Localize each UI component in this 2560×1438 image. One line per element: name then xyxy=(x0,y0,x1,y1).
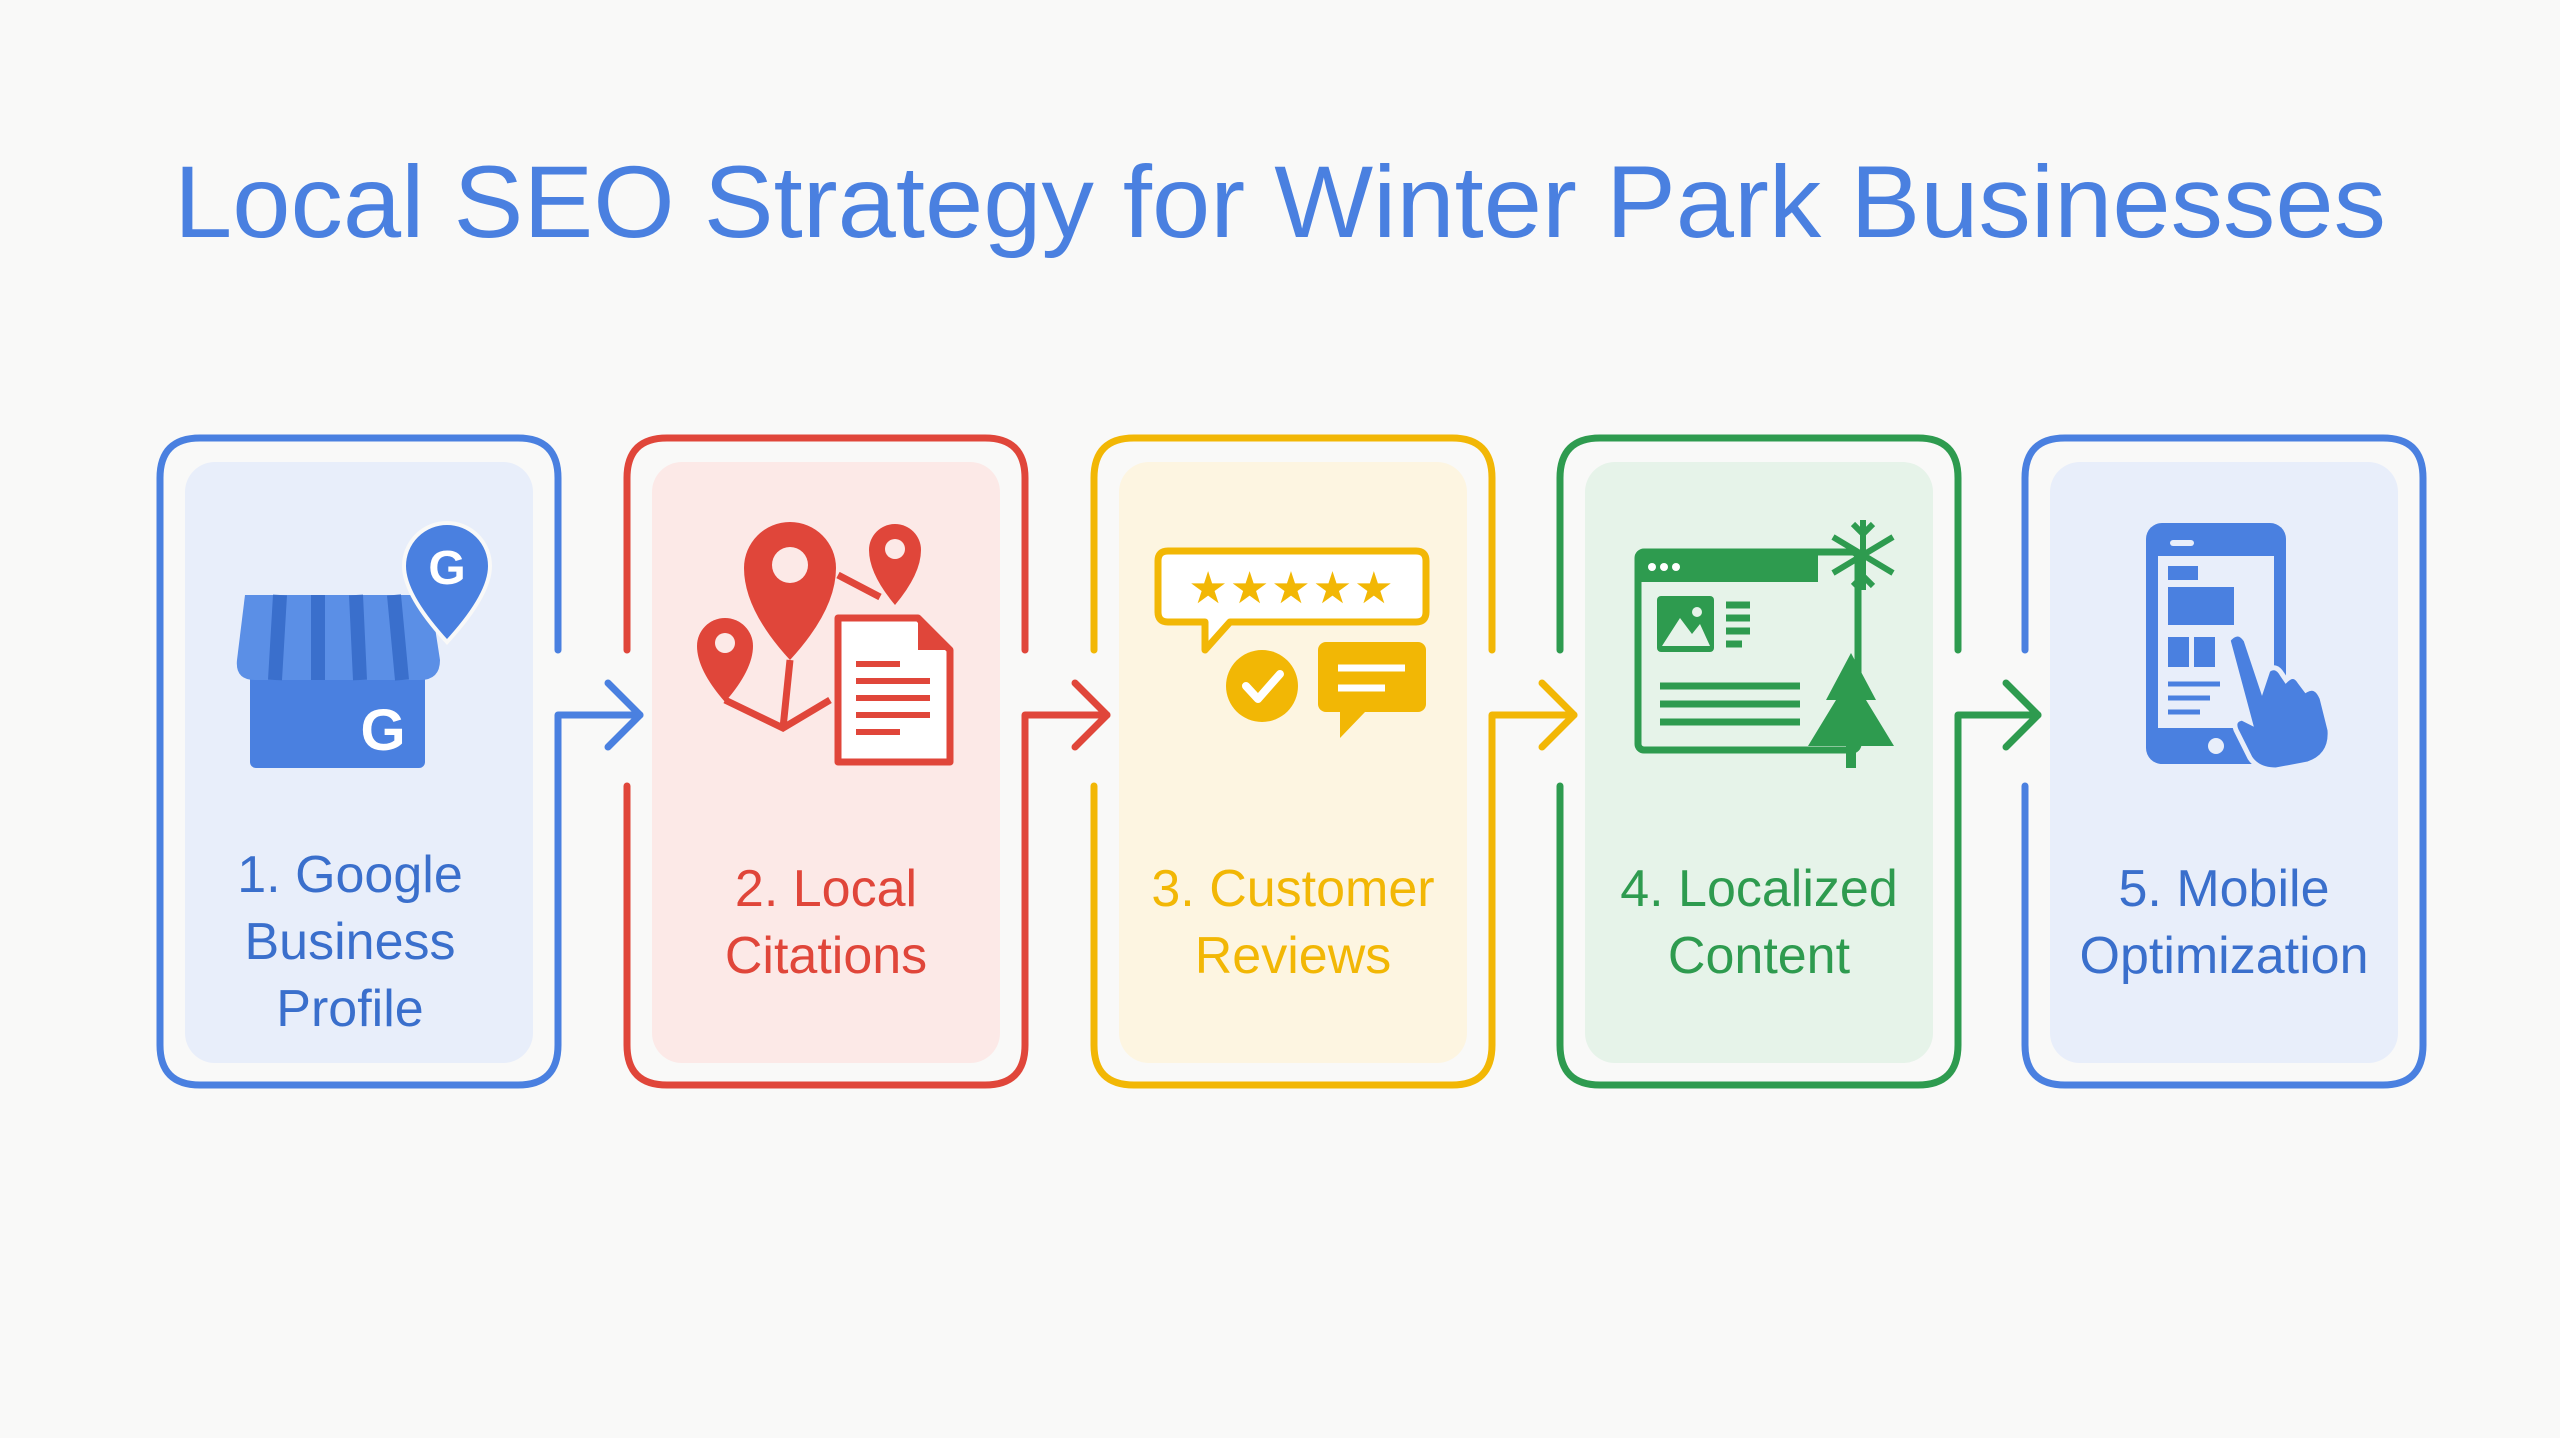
label: step 1: 1. Google xyxy=(237,846,463,904)
label: step 5: Optimization xyxy=(2080,927,2368,985)
icon: storefront with pin: G xyxy=(360,698,406,763)
panel: customer reviews xyxy=(1094,438,1574,1085)
label: step 3: Reviews xyxy=(1195,927,1391,985)
label: step 1: Profile xyxy=(276,980,424,1038)
arrow: 3 to 4 xyxy=(1542,683,1574,747)
label: step 4: 4. Localized xyxy=(1620,860,1898,918)
panel: localized content xyxy=(1560,438,2038,1085)
title: Local SEO Strategy for Winter Park Businesses xyxy=(174,145,2386,259)
arrow: 4 to 5 xyxy=(2006,683,2038,747)
label: step 1: Business xyxy=(244,913,456,971)
arrow: 2 to 3 xyxy=(1075,683,1107,747)
arrow: 1 to 2 xyxy=(608,683,640,747)
label: step 2: Citations xyxy=(725,927,927,985)
icon: review bubbles xyxy=(1158,551,1426,738)
icon: phone with tapping hand xyxy=(2146,523,2330,770)
label: step 4: Content xyxy=(1668,927,1851,985)
label: step 3: 3. Customer xyxy=(1151,860,1435,918)
panel: local citations xyxy=(627,438,1107,1085)
icon: review bubbles: ★★★★★ xyxy=(1188,564,1396,613)
icon: map pins and document xyxy=(697,522,950,762)
icon: storefront with pin: G xyxy=(428,542,466,595)
icon: storefront with pin xyxy=(237,523,490,768)
label: step 5: 5. Mobile xyxy=(2118,860,2330,918)
panel: mobile optimization xyxy=(2025,438,2423,1085)
panel: google business profile xyxy=(160,438,640,1085)
icon: browser with snowflake and tree xyxy=(1638,520,1894,768)
label: step 2: 2. Local xyxy=(735,860,917,918)
